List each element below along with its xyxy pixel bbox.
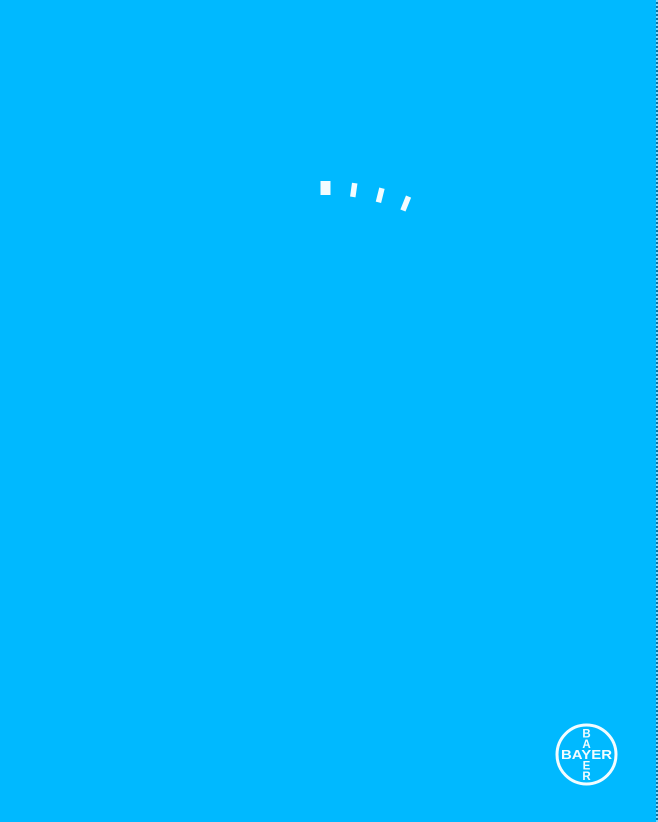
logo wordmark vertical bbox=[582, 728, 591, 783]
logo wordmark vertical: R bbox=[582, 771, 591, 783]
logo wordmark vertical: E bbox=[583, 760, 591, 772]
icon: curved row of white tick marks bbox=[320, 181, 411, 212]
logo wordmark horizontal: BAYER bbox=[561, 748, 612, 762]
icon: Bayer cross logo bbox=[557, 725, 616, 784]
logo wordmark vertical: A bbox=[582, 739, 591, 751]
right edge dashed strip bbox=[656, 0, 658, 822]
logo wordmark vertical: B bbox=[582, 728, 591, 740]
